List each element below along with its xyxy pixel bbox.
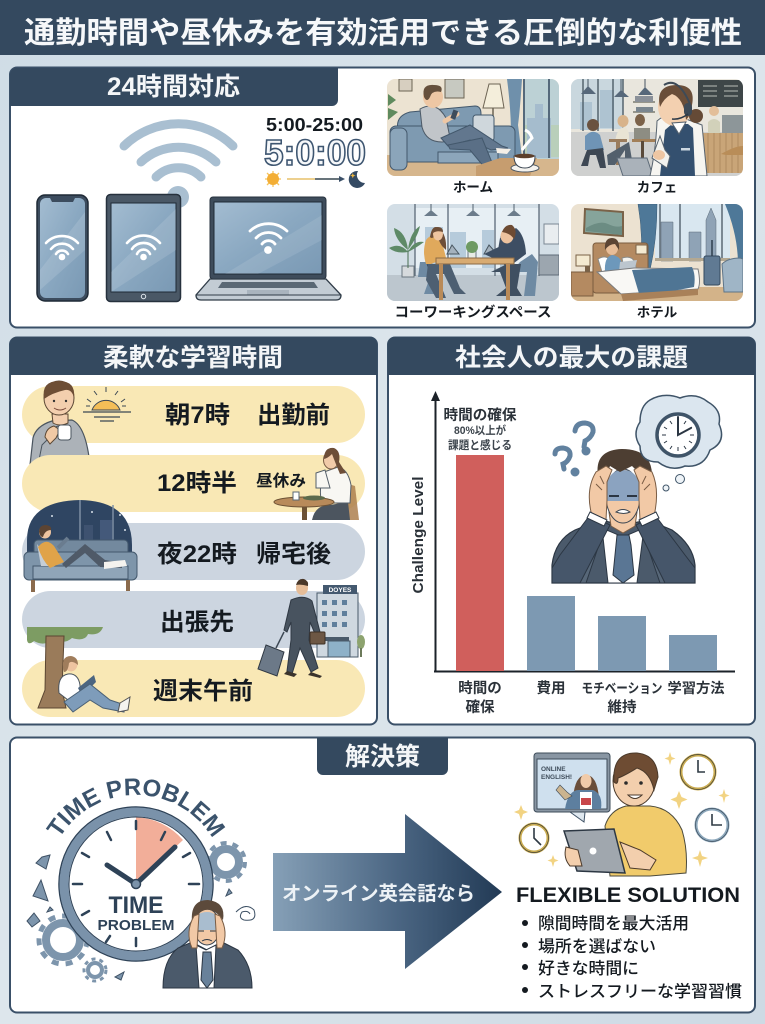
illustration: cafe (571, 79, 743, 176)
curved text: TIME PROBLEM: TIME PROBLEM (46, 778, 226, 837)
heading: 柔軟な学習時間: 柔軟な学習時間 (103, 344, 283, 372)
bar chart: 維持 (608, 698, 637, 716)
hours text: 5:00-25:00 (266, 115, 363, 135)
bar chart: 時間の確保 (444, 407, 517, 424)
bullet list: 隙間時間を最大活用 (538, 914, 689, 933)
bar chart: 時間の (458, 680, 502, 697)
bar chart: モチベーション (582, 681, 662, 696)
icon: woman at lunch (274, 448, 359, 520)
label: コーワーキングスペース: コーワーキングスペース (394, 304, 552, 320)
icon: businessman and hotel (258, 579, 365, 678)
icon: businessman and hotel: DOYES (329, 587, 352, 594)
bar chart: 80%以上が (454, 423, 506, 437)
icon: smartphone (37, 195, 88, 301)
arrow (273, 814, 502, 969)
row: 週末午前: 週末午前 (153, 678, 253, 705)
icon: woman reading under tree (27, 627, 130, 712)
icon: video call window (534, 753, 610, 822)
bullet list (522, 914, 742, 1001)
icon: stressed businessman (552, 449, 695, 583)
heading: 解決策 (317, 738, 448, 775)
icon: large wifi (124, 124, 233, 208)
label: ホーム: ホーム (453, 180, 493, 195)
label: ホテル: ホテル (637, 305, 678, 320)
icon: video call window: ENGLISH! (541, 774, 572, 781)
panel: 柔軟な学習時間 (10, 337, 377, 724)
icon: laptop (196, 197, 341, 300)
bar chart: 課題と感じる (448, 438, 512, 452)
heading: 解決策: 解決策 (345, 743, 420, 771)
icon: tablet (106, 194, 180, 302)
icon: gears and shards (27, 843, 245, 981)
icon: sunrise (83, 387, 131, 421)
clock text: PROBLEM (98, 917, 174, 934)
bullet list: ストレスフリーな学習習慣 (538, 982, 742, 1001)
illustration: coworking space (387, 204, 559, 301)
icon: night window and sofa (24, 500, 137, 592)
title (0, 0, 765, 55)
row: 週末午前 (22, 660, 365, 717)
row: 朝7時 出勤前 (22, 381, 365, 465)
row: 出張先 (22, 591, 365, 648)
icon: clock (59, 807, 213, 961)
row: 12時半 昼休み: 昼休み (256, 472, 306, 490)
row: 朝7時 出勤前: 出勤前 (257, 402, 330, 429)
row: 朝7時 出勤前: 朝7時 (165, 402, 230, 429)
bar chart: 費用 (536, 680, 566, 697)
icon: small clocks (520, 754, 728, 852)
icon: man with tablet (564, 753, 686, 876)
panel: 社会人の最大の課題 (388, 337, 755, 724)
label: カフェ: カフェ (637, 180, 677, 195)
panel: 解決策 (9, 736, 756, 1014)
icon: sparkles (514, 752, 730, 867)
row: 夜22時 帰宅後: 帰宅後 (256, 541, 331, 568)
row: 夜22時 帰宅後 (22, 500, 365, 592)
bullet list: 好きな時間に (538, 959, 639, 978)
panel: 24時間対応 (10, 68, 755, 328)
icon: stressed businessman small (163, 900, 255, 988)
heading: 24時間対応: 24時間対応 (107, 73, 240, 101)
icon: question marks (555, 423, 593, 474)
clock text: TIME (108, 892, 164, 919)
icon: sun to moon arrow (265, 171, 365, 188)
heading: 社会人の最大の課題 (388, 337, 755, 375)
heading: 柔軟な学習時間 (10, 337, 377, 375)
icon: video call window: ONLINE (541, 766, 566, 773)
bar chart (410, 391, 735, 716)
bar chart: Challenge Level (410, 476, 427, 594)
title: 通勤時間や昼休みを有効活用できる圧倒的な利便性 (24, 17, 742, 50)
bar chart: 確保 (466, 699, 495, 716)
row: 出張先: 出張先 (160, 609, 234, 636)
heading: FLEXIBLE SOLUTION: FLEXIBLE SOLUTION (516, 884, 740, 907)
bar chart: 学習方法 (668, 680, 724, 696)
icon: man with coffee (30, 381, 90, 465)
row: 12時半 昼休み (22, 448, 365, 520)
bullet list: 場所を選ばない (538, 937, 656, 956)
row: 夜22時 帰宅後: 夜22時 (157, 541, 237, 568)
arrow text: オンライン英会話なら (282, 883, 475, 905)
digital clock: 5:0:00 (264, 132, 366, 173)
row: 12時半 昼休み: 12時半 (157, 470, 237, 497)
icon: thought bubble with clock (636, 395, 722, 491)
heading: 24時間対応 (10, 68, 338, 106)
heading: 社会人の最大の課題: 社会人の最大の課題 (455, 344, 688, 372)
clock text (98, 892, 174, 934)
illustration: hotel (571, 204, 743, 301)
illustration: home (387, 79, 559, 176)
